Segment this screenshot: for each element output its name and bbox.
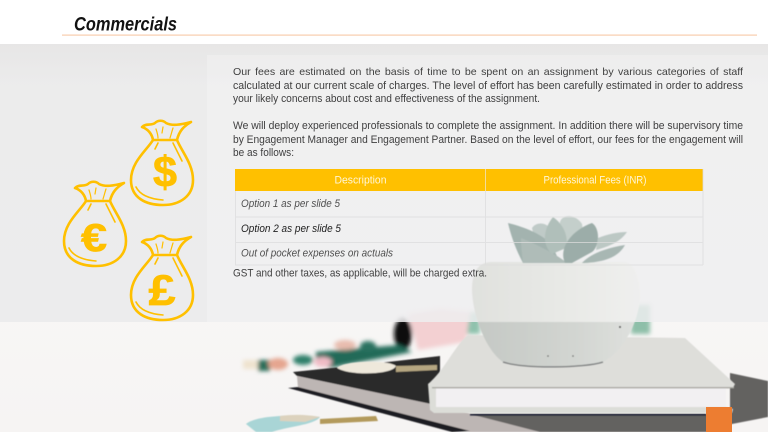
photo: succulent plant (508, 216, 627, 263)
table row: option 2: Option 2 as per slide 5 (241, 223, 342, 235)
text block: fee basis: Our fees are estimated on the basis of time to be spent on an assignment by various categories of staff (233, 67, 743, 78)
icon: euro money bag (64, 182, 126, 266)
text block: fee basis: your likely concerns about cost and effectiveness of the assignment. (233, 93, 540, 105)
icon: pound money bag (131, 236, 193, 320)
photo: grey book (428, 335, 735, 416)
table grid (235, 169, 703, 265)
translucent veil (0, 44, 768, 322)
orange corner square (706, 407, 732, 432)
photo: concrete pot (472, 262, 640, 367)
table header: Professional Fees (INR) (544, 174, 646, 186)
photo: black notebook (288, 356, 768, 432)
photo: paper clip key (246, 415, 378, 432)
table row: option 1: Option 1 as per slide 5 (241, 198, 341, 210)
tax note: GST and other taxes, as applicable, will be charged extra. (233, 268, 487, 280)
content panel (207, 55, 768, 322)
icon: euro money bag: € (81, 217, 107, 260)
text block: fee basis: calculated at our current scale of charges. The level of effort has been carefully estimated in order to address (233, 80, 743, 92)
fees table (235, 169, 703, 265)
text block: staffing: be as follows: (233, 147, 294, 159)
text block: staffing: We will deploy experienced professionals to complete the assignment. In addition there will be supervisory time (233, 120, 743, 132)
title underline (62, 34, 757, 36)
table row: out of pocket: Out of pocket expenses on actuals (241, 248, 393, 260)
photo: blurred pink cup and stationery (243, 305, 650, 371)
icon: pound money bag: £ (148, 267, 176, 315)
text block: fee basis (233, 67, 743, 105)
icon: dollar money bag (131, 121, 193, 205)
title: Commercials (74, 14, 177, 36)
table header: Description (334, 174, 386, 186)
text block: staffing (233, 120, 743, 159)
table header (235, 169, 703, 191)
text block: staffing: by Engagement Manager and Engagement Partner. Based on the level of effort, our fees for the engagement will (233, 134, 743, 146)
icon: dollar money bag: $ (153, 148, 177, 197)
